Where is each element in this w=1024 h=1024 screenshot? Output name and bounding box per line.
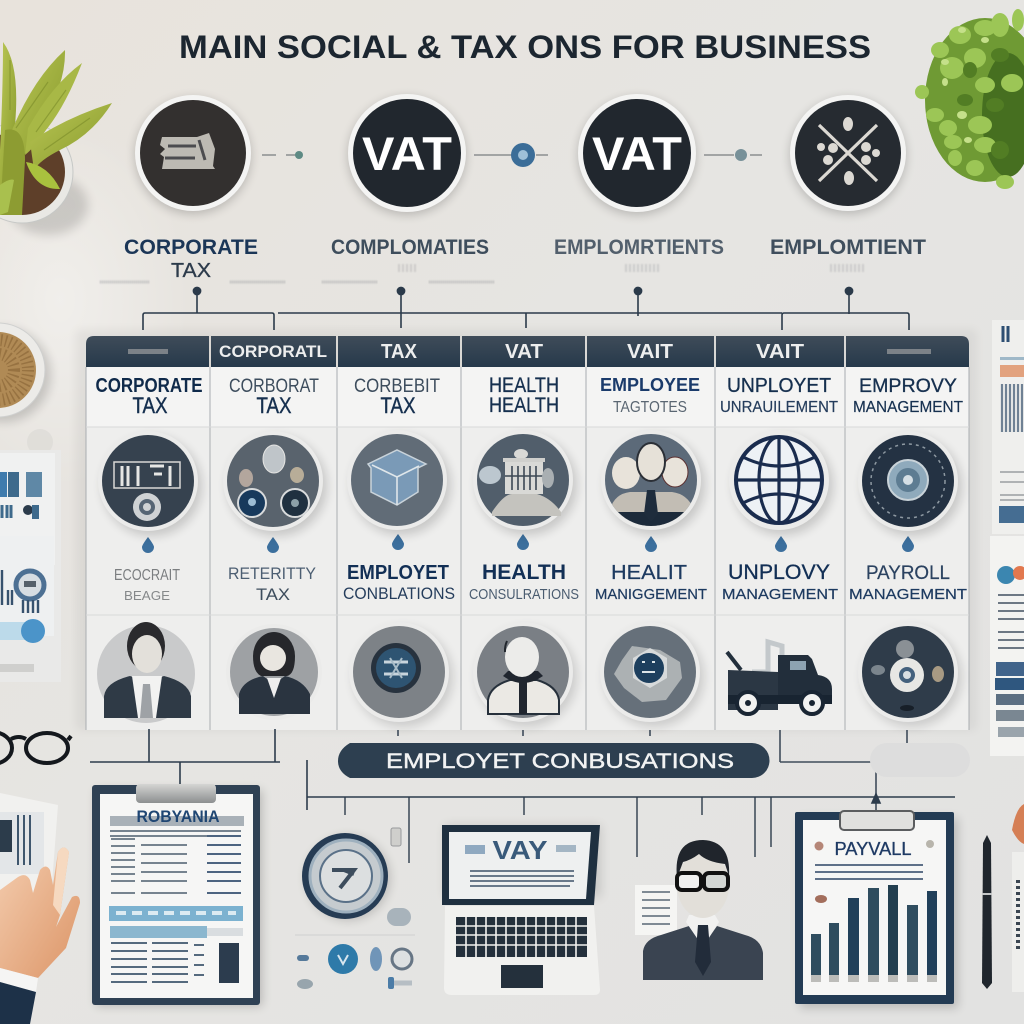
clipboard: report: ROBYANIA	[136, 807, 220, 826]
tax type 4 circle: crossed tools icon	[790, 95, 906, 214]
plant: top right foliage	[915, 9, 1024, 189]
faint sublabels	[100, 268, 866, 282]
title: MAIN SOCIAL & TAX ONS FOR BUSINESS	[179, 29, 871, 65]
businessman with glasses	[635, 840, 763, 980]
left lower: sheet under hand	[0, 793, 58, 944]
row 2 labels: UNPLOVY	[728, 561, 830, 584]
row 1 icon: institution	[473, 430, 577, 535]
row 2 labels: MANIGGEMENT	[595, 586, 707, 603]
connector dots between top circles	[262, 143, 762, 167]
row 1 labels: EMPROVY	[859, 376, 957, 397]
faint round coaster mark	[27, 429, 53, 455]
row 1 labels: UNPLOYET	[727, 375, 831, 397]
row 2 labels: EMPLOYET	[347, 562, 449, 584]
clipboard: payroll bar chart: PAYVALL	[834, 839, 912, 859]
row 2 labels: CONSULRATIONS	[469, 586, 579, 603]
lower banner: EMPLOYET CONBUSATIONS	[386, 750, 734, 773]
row 2 icon: man in suit	[97, 622, 195, 723]
top labels: CORPORATE	[124, 236, 258, 259]
row 1 labels: TAGTOTES	[613, 399, 687, 416]
row 2 labels: HEALTH	[482, 561, 566, 584]
left decoration: coffee cup	[0, 323, 51, 422]
tax type 3 circle: VAT	[578, 94, 696, 215]
laptop	[442, 825, 601, 995]
row 2 labels: ECOCRAIT	[114, 567, 180, 584]
row 2 icon: coin emblem	[349, 622, 453, 727]
top labels: EMPLOMTIENT	[770, 236, 926, 259]
clipboard: payroll bar chart	[795, 811, 958, 1008]
row 2 labels: MANAGEMENT	[849, 586, 967, 603]
row 2 labels: RETERITTY	[228, 564, 316, 583]
row 1 labels: CORPORATE	[96, 375, 202, 397]
column header bars	[86, 336, 969, 367]
table panel	[86, 336, 969, 730]
row 2 icon: worker	[473, 622, 577, 727]
lower connector lines	[90, 729, 955, 863]
connector tree from top circles to table	[143, 287, 909, 330]
row 1 labels: CORBORAT	[229, 376, 319, 397]
row 2 icon: woman	[226, 624, 322, 720]
row 1 labels: TAX	[132, 393, 168, 418]
row 2 icon: tow truck	[727, 642, 832, 714]
column header labels: VAT	[505, 341, 543, 363]
pen	[982, 835, 992, 989]
column header labels	[128, 341, 931, 363]
top labels	[124, 236, 926, 282]
row 2 icon: tools	[858, 622, 962, 727]
column header labels: VAIT	[756, 341, 804, 363]
right lower: note and cable	[1012, 804, 1024, 992]
row 1 labels: TAX	[256, 393, 292, 418]
column header labels: TAX	[381, 341, 418, 363]
row 1 labels: HEALTH	[489, 374, 559, 397]
row 1 labels: CORBEBIT	[354, 376, 440, 397]
laptop: VAY	[492, 835, 548, 865]
row 1 labels: HEALTH	[489, 394, 559, 417]
row 1 labels: EMPLOYEE	[600, 375, 700, 395]
row 2 labels: MANAGEMENT	[722, 586, 838, 603]
tax type 2 circle: VAT	[348, 94, 466, 215]
row 1 icon: shields and coins	[223, 431, 327, 536]
row 1 icon: box	[347, 430, 451, 535]
left decoration: printed report	[0, 450, 61, 682]
row 2 labels: CONBLATIONS	[343, 584, 455, 603]
tax type 3 circle: VAT: VAT	[592, 127, 682, 180]
row 2 labels	[114, 561, 967, 604]
glasses	[0, 732, 71, 764]
plant: top left potted leaves	[0, 42, 112, 235]
row 2 icon: gear badge	[600, 622, 704, 727]
seal icon cluster	[295, 828, 415, 989]
row 1 labels	[96, 374, 963, 418]
row 1 labels: MANAGEMENT	[853, 399, 963, 416]
top labels: COMPLOMATIES	[331, 236, 489, 259]
column and row rules	[86, 367, 969, 730]
row 1 icon: group of people	[600, 430, 705, 535]
row 1 icon: globe	[729, 430, 833, 535]
row 2 labels: PAYROLL	[866, 563, 950, 584]
right decoration: stacked documents	[990, 320, 1024, 756]
column header labels: CORPORATL	[219, 342, 327, 361]
row 1 icon: building	[98, 431, 202, 536]
top labels: TAX	[171, 260, 211, 282]
lower banner	[338, 743, 970, 778]
row 2 labels: BEAGE	[124, 588, 170, 603]
row 1 labels: UNRAUILEMENT	[720, 399, 838, 416]
row 2 labels: HEALIT	[611, 562, 687, 584]
tax type 1 circle: corporate tax icon	[135, 95, 251, 214]
clipboard: report	[92, 784, 262, 1006]
hand with sleeve	[0, 848, 80, 1024]
droplets	[142, 534, 914, 553]
row 2 labels: TAX	[256, 585, 290, 604]
row 1 icon: dial	[858, 431, 962, 536]
top labels: EMPLOMRTIENTS	[554, 236, 724, 259]
row 1 labels: TAX	[380, 393, 416, 418]
column header labels: VAIT	[627, 341, 673, 363]
tax type 2 circle: VAT: VAT	[362, 127, 452, 180]
